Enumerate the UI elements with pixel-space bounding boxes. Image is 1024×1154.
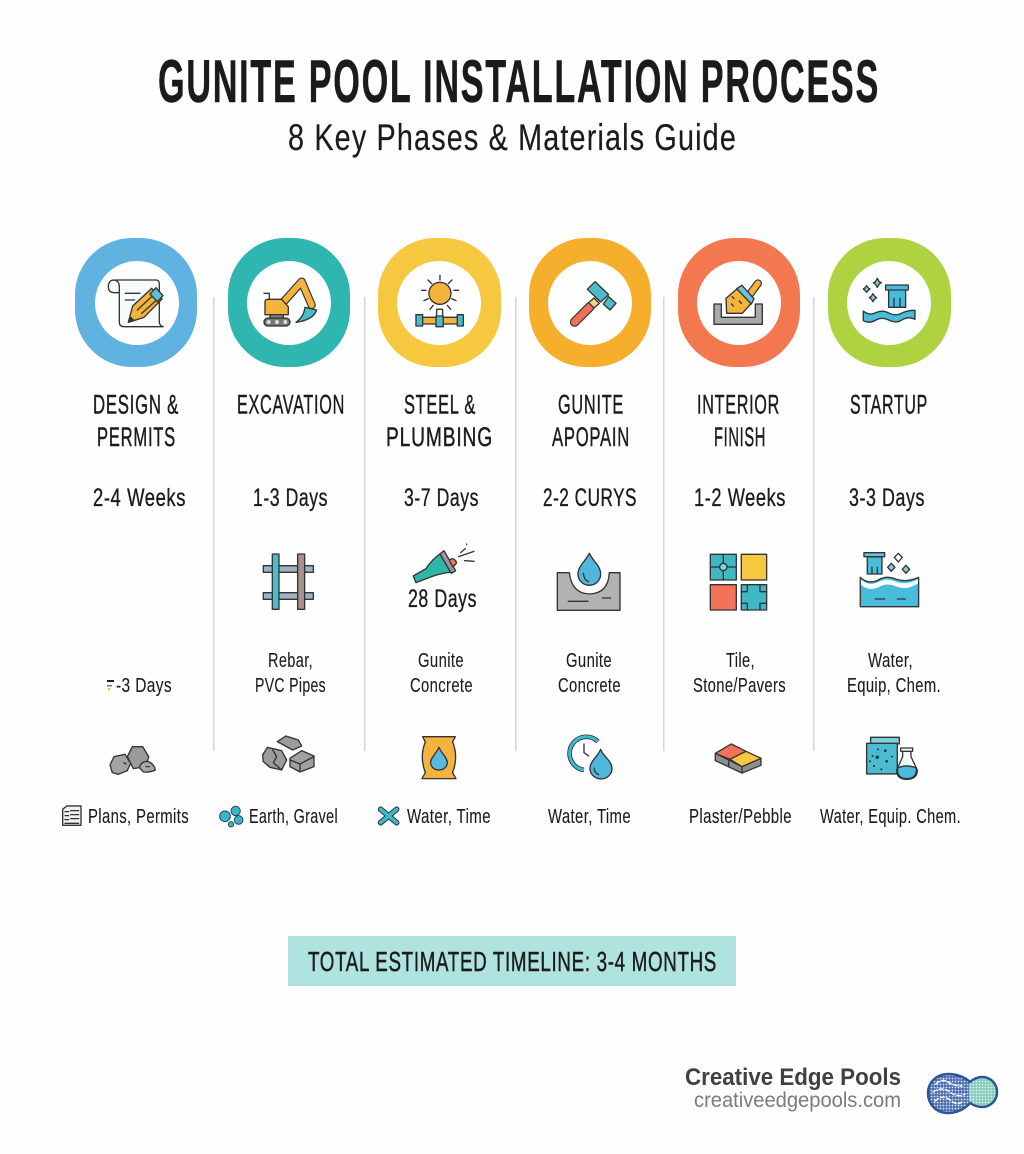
materials: tile, stone/pavers [693,649,786,697]
panel: interior finish [678,238,800,828]
duration: gunite: 2-2 CURYS [543,484,637,512]
icon: cement bag [422,737,456,779]
heading: gunite apopain [552,390,630,452]
material: water, time: Water, Time [407,805,491,828]
heading: interior finish: FINISH [714,422,766,452]
icon: rebar [263,554,313,609]
materials: gunite concrete: Concrete [410,674,473,697]
heading: steel and plumbing: PLUMBING [386,422,493,452]
ring badge: gunite [529,238,651,367]
heading: design and permits [93,390,179,452]
materials: water, equip, chem: Equip, Chem. [847,674,941,697]
secondary duration: -3 Days [116,674,172,697]
duration: interior: 1-2 Weeks [694,484,786,512]
heading: design and permits: DESIGN & [93,390,179,420]
icon: rocks [110,747,155,774]
icon: spray nozzle [413,544,474,583]
material: plans, permits: Plans, Permits [88,805,189,828]
heading: steel and plumbing: STEEL & [404,390,476,420]
duration: 28 days: 28 Days [408,585,477,613]
duration: excavation: 1-3 Days [253,484,328,512]
panel: design and permits [63,238,197,828]
panel: steel and plumbing [378,238,501,828]
material: plaster/pebble: Plaster/Pebble [689,805,792,828]
icon: broken rocks [263,736,314,772]
materials: gunite concrete: Concrete [558,674,621,697]
icon: chemicals [867,737,917,779]
materials: gunite concrete [558,649,621,697]
duration: steel: 3-7 Days [404,484,479,512]
icon: tile grid [710,554,767,610]
heading: startup: STARTUP [850,390,928,420]
brand name: Creative Edge Pools [685,1064,901,1091]
materials: rebar, pvc pipes: Rebar, [268,649,313,672]
materials: gunite concrete [410,649,473,697]
subtitle: 8 Key Phases & Materials Guide [288,117,737,158]
material: plans, permits [63,805,189,828]
icon: plaster brush [714,283,762,324]
callout: total timeline [288,936,736,986]
material: earth, gravel: Earth, Gravel [249,805,338,828]
icon: drop in basin [557,553,620,610]
materials: gunite concrete: Gunite [418,649,464,672]
materials: gunite concrete: Gunite [566,649,612,672]
icon: filling pool [860,553,919,607]
ring badge: design [75,238,197,367]
materials: water, equip, chem [847,649,941,697]
heading: steel and plumbing [386,390,493,452]
material: water, time [381,805,491,828]
materials: rebar, pvc pipes [255,649,326,697]
materials: rebar, pvc pipes: PVC Pipes [255,674,326,697]
icon: clock and drop [570,737,612,779]
icon: paver block [715,744,761,773]
heading: interior finish: INTERIOR [697,390,780,420]
materials: water, equip, chem: Water, [868,649,913,672]
panel: startup [820,238,961,828]
material: water, equip. chem.: Water, Equip. Chem. [820,805,961,828]
icon: hammer [575,282,616,322]
materials: tile, stone/pavers: Stone/Pavers [693,674,786,697]
secondary duration [107,674,172,697]
heading: excavation: EXCAVATION [237,390,345,420]
icon: excavator [264,282,317,326]
brand url: creativeedgepools.com [694,1089,901,1112]
icon: scroll and pencil [108,280,163,327]
ring badge: steel [378,238,501,367]
heading: interior finish [697,390,780,452]
duration: startup: 3-3 Days [849,484,925,512]
materials: tile, stone/pavers: Tile, [726,649,755,672]
material: earth, gravel [220,805,338,828]
heading: gunite apopain: GUNITE [558,390,624,420]
heading: design and permits: PERMITS [97,422,176,452]
ring badge: excavation [228,238,350,367]
icon: water and filter [863,278,915,322]
heading: gunite apopain: APOPAIN [552,422,630,452]
ring badge: startup [828,238,951,367]
callout: total timeline: TOTAL ESTIMATED TIMELINE: 3-4 MONTHS [308,946,717,977]
panel: excavation [220,238,350,828]
duration: design: 2-4 Weeks [93,484,186,512]
ring badge: interior [678,238,800,367]
panel: gunite application [529,238,651,828]
icon: sun and pipe [416,275,463,327]
icon: logo [928,1074,997,1113]
material: water, time: Water, Time [548,805,631,828]
